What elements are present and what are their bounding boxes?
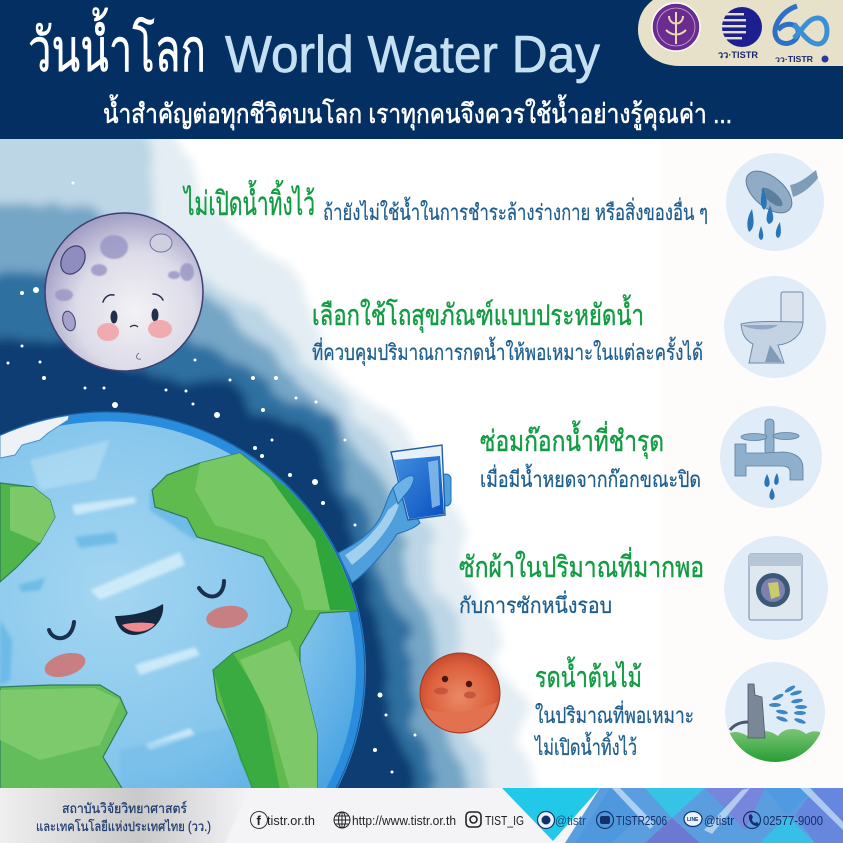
- icon: globe: [334, 812, 350, 828]
- tip 4: full wash loads: [459, 547, 704, 618]
- logo plate: [638, 0, 843, 66]
- footer: [0, 788, 843, 843]
- tip 5: water plants: ไม่เปิดน้ำทิ้งไว้: [534, 732, 637, 760]
- continent: lower left: [0, 685, 127, 790]
- icon: line: [684, 812, 702, 826]
- stars: [6, 182, 416, 774]
- icon: facebook: [250, 812, 268, 828]
- logo: 60 years: [775, 6, 828, 64]
- icon: shower head: [726, 153, 824, 251]
- continent: upper left: [0, 483, 55, 582]
- icon: line: LINE: [687, 817, 699, 823]
- icon: telephone: [744, 812, 760, 828]
- website facebook: tistr.or.th: [267, 814, 315, 828]
- earth character: [0, 412, 451, 790]
- footer diamond pattern: [502, 788, 843, 843]
- tip 5: water plants: ในปริมาณที่พอเหมาะ: [535, 700, 694, 728]
- icon: youtube: [596, 812, 614, 828]
- mouth: [115, 604, 163, 635]
- arm holding a glass of water: [338, 445, 451, 583]
- tip 3: repair broken faucets: เมื่อมีน้ำหยดจากก๊อกขณะปิด: [480, 464, 701, 492]
- tip 1: do not leave water running: [182, 180, 708, 225]
- left eye: [49, 622, 74, 638]
- continent: right: [152, 453, 368, 790]
- watercolor space background: [0, 139, 538, 788]
- ice cap: [0, 412, 70, 458]
- title english: World Water Day: [225, 26, 600, 84]
- tip 1: do not leave water running: ถ้ายังไม่ใช้น้ำในการชำระล้างร่างกาย หรือสิ่งของอื่น ๆ: [323, 197, 708, 225]
- ocean: [0, 416, 361, 790]
- title thai: วันน้ำโลก: [28, 7, 206, 84]
- tip 4: full wash loads: กับการซักหนึ่งรอบ: [459, 590, 612, 618]
- organisation name: สถาบันวิจัยวิทยาศาสตร์: [62, 800, 187, 816]
- tip 1: do not leave water running: ไม่เปิดน้ำทิ้งไว้: [182, 180, 315, 222]
- tip 2: use water-saving sanitary ware: เลือกใช้โถสุขภัณฑ์แบบประหยัดน้ำ: [312, 294, 644, 333]
- organisation name: [36, 800, 211, 834]
- icon: facebook: f: [256, 813, 262, 828]
- icon: garden sprinkler: [725, 662, 825, 765]
- twitter handle: @tistr: [555, 814, 586, 828]
- moon character: [45, 213, 203, 371]
- logo: TISTR globe: [716, 7, 762, 61]
- logo: seal: [652, 3, 700, 51]
- tip 4: full wash loads: ซักผ้าในปริมาณที่มากพอ: [459, 547, 704, 584]
- icon: washing machine: [724, 536, 828, 640]
- tip 5: water plants: รดน้ำต้นไม้: [535, 656, 642, 694]
- header band: [0, 0, 843, 139]
- icon: dripping faucet: [720, 406, 822, 508]
- tip 3: repair broken faucets: [480, 420, 701, 492]
- icon: toilet: [724, 276, 826, 378]
- line handle: @tistr: [704, 814, 734, 828]
- icon: twitter: [538, 812, 554, 828]
- tip 5: water plants: [534, 656, 694, 760]
- telephone number: 02577-9000: [763, 814, 823, 828]
- tip 2: use water-saving sanitary ware: [312, 294, 703, 366]
- face: [42, 581, 249, 681]
- website url: http://www.tistr.or.th: [352, 814, 456, 828]
- cheeks: [42, 649, 88, 681]
- organisation name: และเทคโนโลยีแห่งประเทศไทย (วว.): [36, 818, 211, 834]
- logo: TISTR globe: วว·TISTR: [718, 50, 758, 61]
- tip 2: use water-saving sanitary ware: ที่ควบคุมปริมาณการกดน้ำให้พอเหมาะในแต่ละครั้งได้: [312, 337, 703, 366]
- glass: [391, 445, 445, 520]
- right eye: [199, 581, 224, 596]
- youtube handle: TISTR2506: [616, 814, 667, 828]
- subtitle: น้ำสำคัญต่อทุกชีวิตบนโลก เราทุกคนจึงควรใช้น้ำอย่างรู้คุณค่า ...: [103, 94, 732, 131]
- instagram handle: TIST_IG: [485, 814, 524, 828]
- tip 3: repair broken faucets: ซ่อมก๊อกน้ำที่ชำรุด: [480, 420, 664, 459]
- logo: 60 years: วว·TISTR: [775, 55, 813, 64]
- mars character: [420, 653, 500, 733]
- ocean highlights: [30, 440, 200, 750]
- icon: instagram: [466, 812, 481, 827]
